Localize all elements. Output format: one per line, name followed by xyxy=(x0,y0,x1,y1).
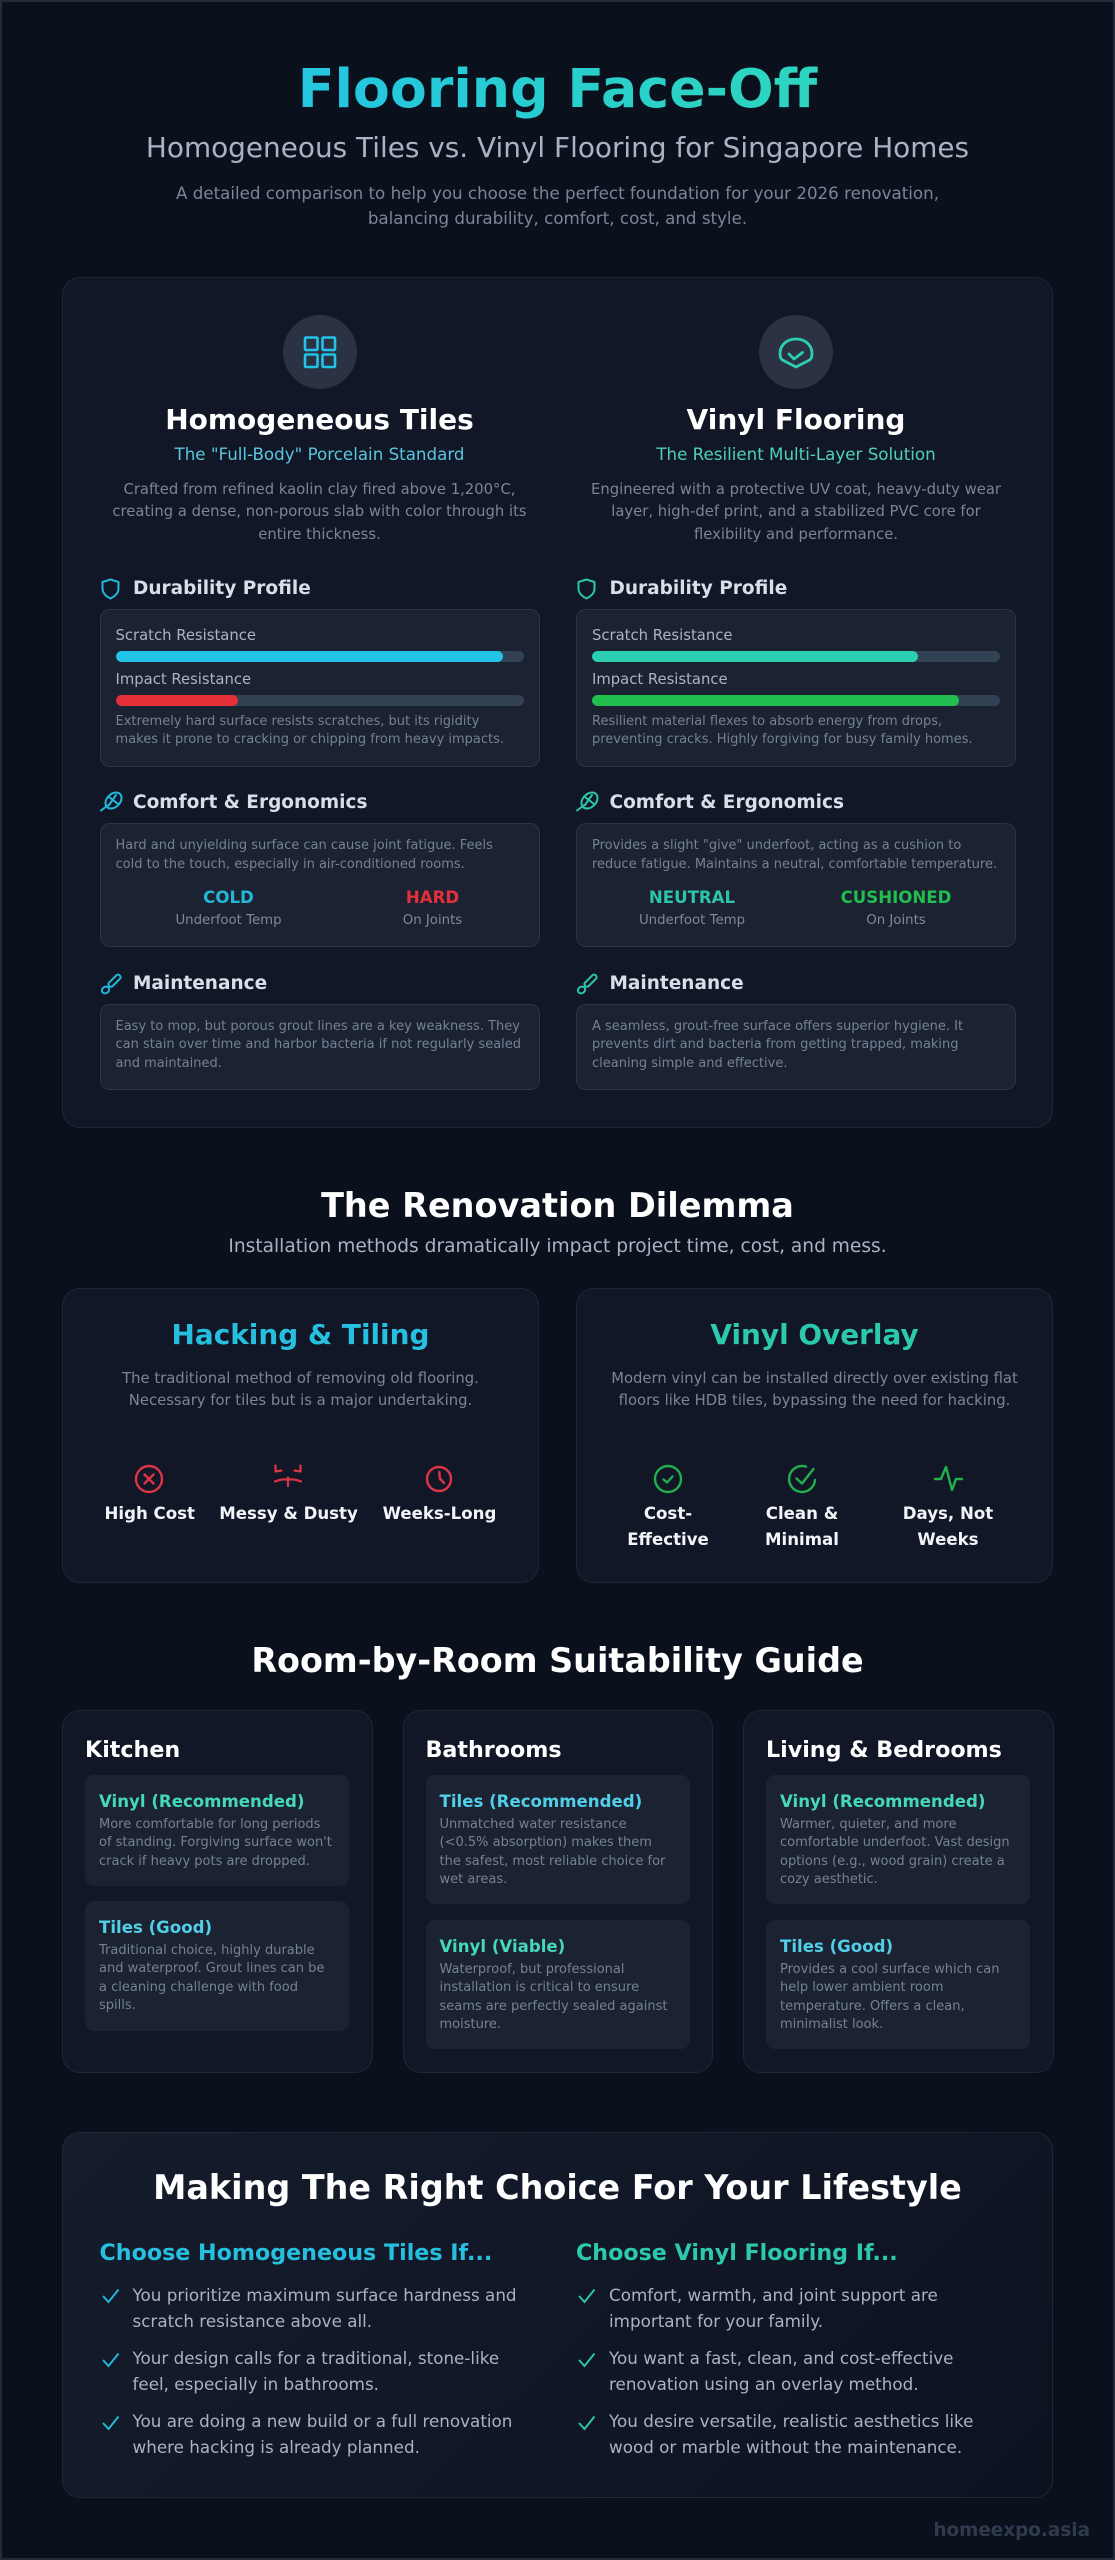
icon: check xyxy=(578,2286,598,2306)
description xyxy=(611,1370,1018,1408)
heading: Choose Vinyl Flooring If... xyxy=(576,2240,898,2266)
card text: wet areas. xyxy=(440,1872,507,1887)
box: maintenance xyxy=(576,1004,1016,1090)
description: The traditional method of removing old flooring. xyxy=(122,1370,479,1386)
heading: Vinyl Overlay xyxy=(710,1318,919,1350)
card: vinyl viable xyxy=(426,1920,690,2049)
heading: comfort: Comfort & Ergonomics xyxy=(610,792,844,813)
label: cost-effective: Effective xyxy=(627,1530,709,1548)
intro text: balancing durability, comfort, cost, and style. xyxy=(368,208,747,228)
list item: feel, especially in bathrooms. xyxy=(132,2374,379,2394)
intro text xyxy=(176,182,939,228)
card text: temperature. Offers a clean, xyxy=(780,1999,965,2014)
icon: feather xyxy=(100,792,122,812)
card text: Waterproof, but professional xyxy=(440,1962,624,1976)
stat label: on joints: On Joints xyxy=(403,913,462,928)
list item xyxy=(132,2285,517,2331)
card text: Provides a cool surface which can xyxy=(780,1962,1000,1976)
icon: feather xyxy=(576,792,598,812)
maintenance note xyxy=(592,1019,963,1071)
card text: comfortable underfoot. Vast design xyxy=(780,1835,1010,1850)
stat label: underfoot temp: Underfoot Temp xyxy=(639,913,745,928)
card text: More comfortable for long periods xyxy=(99,1816,320,1832)
icon: tile grid xyxy=(282,315,356,389)
durability note: Resilient material flexes to absorb energy from drops, xyxy=(592,714,942,729)
label: weeks-long: Weeks-Long xyxy=(383,1504,496,1522)
card title: Tiles (Recommended) xyxy=(440,1792,642,1810)
comfort note: cold to the touch, especially in air-conditioned rooms. xyxy=(116,857,465,872)
room name: Bathrooms xyxy=(426,1737,562,1763)
stat label: on joints: On Joints xyxy=(866,913,926,928)
description xyxy=(112,481,527,543)
list item: wood or marble without the maintenance. xyxy=(609,2437,962,2457)
tagline: The "Full-Body" Porcelain Standard xyxy=(174,444,464,464)
card text xyxy=(99,1942,324,2013)
card text: Unmatched water resistance xyxy=(440,1816,627,1832)
card text: help lower ambient room xyxy=(780,1980,944,1995)
description: Crafted from refined kaolin clay fired above 1,200°C, xyxy=(124,481,516,498)
stat label: underfoot temp: Underfoot Temp xyxy=(175,913,282,928)
icon: activity xyxy=(934,1466,964,1492)
heading: Choose Homogeneous Tiles If... xyxy=(100,2240,492,2266)
panel: kitchen xyxy=(62,1710,372,2073)
list item: You want a fast, clean, and cost-effective xyxy=(609,2348,954,2368)
label: cost-effective xyxy=(627,1504,709,1548)
column: choose vinyl xyxy=(576,2236,1016,2476)
label: clean and minimal: Minimal xyxy=(765,1530,839,1548)
maintenance note: cleaning simple and effective. xyxy=(592,1056,787,1071)
icon: shield xyxy=(102,578,120,600)
column: vinyl flooring xyxy=(576,315,1016,1090)
card text xyxy=(440,1816,666,1887)
icon: shield xyxy=(578,578,596,600)
icon: check xyxy=(102,2288,120,2304)
heading: Vinyl Flooring xyxy=(687,402,905,436)
card: vinyl recommended xyxy=(766,1775,1030,1904)
card text: minimalist look. xyxy=(780,2017,883,2032)
icon: check xyxy=(102,2413,122,2433)
description: Engineered with a protective UV coat, heavy-duty wear xyxy=(591,481,1001,498)
icon: brush xyxy=(576,974,598,994)
durability note: makes it prone to cracking or chipping from heavy impacts. xyxy=(116,732,504,747)
heading: maintenance: Maintenance xyxy=(610,972,744,994)
label: scratch: Scratch Resistance xyxy=(592,626,732,644)
card: tiles good xyxy=(766,1920,1030,2049)
icon: check xyxy=(578,2413,598,2433)
heading: Making The Right Choice For Your Lifestyle xyxy=(153,2168,962,2206)
label: impact: Impact Resistance xyxy=(592,670,728,688)
list item: Your design calls for a traditional, stone-like xyxy=(132,2348,499,2368)
icon: check xyxy=(578,2350,598,2370)
bar: impact 90% xyxy=(592,695,1000,706)
comfort note xyxy=(116,838,493,872)
description: Modern vinyl can be installed directly over existing flat xyxy=(611,1370,1018,1386)
footer brand: homeexpo.asia xyxy=(933,2520,1090,2541)
label: scratch: Scratch Resistance xyxy=(116,626,256,644)
icon: clean check xyxy=(788,1464,816,1494)
heading: durability: Durability Profile xyxy=(133,578,311,598)
list item: Comfort, warmth, and joint support are xyxy=(609,2285,938,2305)
label: messy and dusty: Messy & Dusty xyxy=(219,1504,358,1522)
column: choose tiles xyxy=(100,2240,517,2457)
label: days not weeks xyxy=(903,1504,993,1548)
maintenance note xyxy=(116,1019,521,1071)
card text: installation is critical to ensure xyxy=(440,1980,639,1995)
tagline: The Resilient Multi-Layer Solution xyxy=(656,444,936,464)
panel: lifestyle choice xyxy=(62,2132,1053,2498)
icon: brush xyxy=(100,974,122,994)
maintenance note: Easy to mop, but porous grout lines are a key weakness. They xyxy=(116,1019,520,1034)
icon: vinyl badge xyxy=(759,315,833,389)
comfort note: reduce fatigue. Maintains a neutral, comfortable temperature. xyxy=(592,857,997,872)
box: maintenance xyxy=(100,1004,540,1090)
card text xyxy=(440,1962,668,2032)
bar: impact 30% xyxy=(116,695,524,706)
panel: bathrooms xyxy=(402,1710,713,2073)
description xyxy=(591,481,1001,543)
card text: of standing. Forgiving surface won't xyxy=(99,1835,332,1850)
card title: Vinyl (Recommended) xyxy=(780,1792,985,1810)
label: days not weeks: Days, Not xyxy=(903,1504,993,1522)
label: days not weeks: Weeks xyxy=(917,1530,979,1548)
list item: You desire versatile, realistic aesthetics like xyxy=(609,2411,973,2431)
box: durability bars xyxy=(100,609,540,766)
heading: room guide: Room-by-Room Suitability Guide xyxy=(251,1641,864,1680)
room name: Living & Bedrooms xyxy=(766,1737,1002,1763)
title: Flooring Face-Off xyxy=(298,56,817,120)
column: homogeneous tiles xyxy=(100,315,540,1090)
list item: You are doing a new build or a full renovation xyxy=(132,2411,512,2431)
durability note xyxy=(592,714,973,747)
list item xyxy=(132,2408,512,2460)
description: Necessary for tiles but is a major undertaking. xyxy=(129,1392,472,1408)
card text: crack if heavy pots are dropped. xyxy=(99,1854,310,1869)
box: durability bars xyxy=(576,609,1016,766)
card: vinyl recommended xyxy=(85,1775,349,1886)
list item: You prioritize maximum surface hardness and xyxy=(132,2285,517,2305)
title xyxy=(0,56,1115,120)
card text: Warmer, quieter, and more xyxy=(780,1816,956,1832)
heading: Hacking & Tiling xyxy=(172,1318,429,1350)
maintenance note: A seamless, grout-free surface offers superior hygiene. It xyxy=(592,1019,963,1034)
icon: dust xyxy=(274,1464,302,1488)
list item: important for your family. xyxy=(609,2311,823,2331)
panel: material comparison xyxy=(62,277,1053,1128)
description: layer, high-def print, and a stabilized PVC core for xyxy=(611,503,981,520)
comfort note xyxy=(592,838,997,872)
label: impact: Impact Resistance xyxy=(116,670,251,688)
card text: options (e.g., wood grain) create a xyxy=(780,1854,1005,1869)
stat: hard: HARD xyxy=(406,888,459,907)
header xyxy=(146,56,969,228)
subtitle: Homogeneous Tiles vs. Vinyl Flooring for Singapore Homes xyxy=(146,131,969,164)
maintenance note: can stain over time and harbor bacteria if not regularly sealed xyxy=(116,1037,521,1052)
icon: check xyxy=(102,2352,120,2368)
subheading: renovation: Installation methods dramatically impact project time, cost, and mess. xyxy=(228,1236,887,1257)
description: creating a dense, non-porous slab with color through its xyxy=(112,503,527,520)
heading: Homogeneous Tiles xyxy=(165,402,474,436)
card: tiles recommended xyxy=(426,1775,690,1904)
label: clean and minimal xyxy=(765,1504,839,1548)
panel: hacking and tiling xyxy=(62,1288,539,1583)
room name: Kitchen xyxy=(85,1737,180,1763)
list item: renovation using an overlay method. xyxy=(609,2374,919,2394)
maintenance note: prevents dirt and bacteria from getting trapped, making xyxy=(592,1037,959,1052)
durability note: Extremely hard surface resists scratches, but its rigidity xyxy=(116,714,479,729)
maintenance note: and maintained. xyxy=(116,1056,222,1071)
description: entire thickness. xyxy=(258,526,381,543)
box: comfort xyxy=(100,823,540,947)
stat: cold: COLD xyxy=(203,888,254,907)
panel: vinyl overlay xyxy=(576,1288,1053,1583)
description xyxy=(122,1370,479,1408)
list item xyxy=(609,2282,938,2334)
stat: neutral: NEUTRAL xyxy=(649,888,735,907)
label: cost-effective: Cost- xyxy=(644,1504,692,1522)
description: floors like HDB tiles, bypassing the need for hacking. xyxy=(619,1392,1010,1408)
list item xyxy=(132,2348,499,2394)
card text: cozy aesthetic. xyxy=(780,1872,878,1887)
card text: a cleaning challenge with food xyxy=(99,1980,298,1995)
heading: durability: Durability Profile xyxy=(610,578,787,598)
list item xyxy=(609,2408,973,2460)
stat: cushioned: CUSHIONED xyxy=(841,888,951,907)
list item xyxy=(609,2345,954,2397)
card text: seams are perfectly sealed against xyxy=(440,1999,667,2014)
comfort note: Hard and unyielding surface can cause joint fatigue. Feels xyxy=(116,838,493,853)
card text: (<0.5% absorption) makes them xyxy=(440,1835,652,1850)
icon: check circle xyxy=(654,1464,682,1494)
card text: spills. xyxy=(99,1998,136,2013)
comfort note: Provides a slight "give" underfoot, acting as a cushion to xyxy=(592,838,961,853)
icon: clock xyxy=(426,1466,452,1492)
card: tiles good xyxy=(85,1901,349,2031)
panel: living and bedrooms xyxy=(743,1710,1054,2073)
box: comfort xyxy=(576,823,1016,947)
card title: Vinyl (Viable) xyxy=(440,1936,565,1956)
card text: moisture. xyxy=(440,2017,501,2032)
card text xyxy=(780,1962,1000,2032)
card text xyxy=(780,1816,1010,1887)
heading: renovation dilemma: The Renovation Dilemma xyxy=(321,1186,794,1224)
card text: Traditional choice, highly durable xyxy=(99,1942,315,1958)
card title: Vinyl (Recommended) xyxy=(99,1792,304,1810)
bar: scratch 95% xyxy=(116,651,524,662)
description: flexibility and performance. xyxy=(694,526,898,543)
label: high cost: High Cost xyxy=(104,1504,195,1522)
card title: Tiles (Good) xyxy=(99,1918,212,1936)
label: clean and minimal: Clean & xyxy=(766,1504,838,1522)
list item: scratch resistance above all. xyxy=(132,2311,372,2331)
durability note: preventing cracks. Highly forgiving for busy family homes. xyxy=(592,732,973,747)
bar: scratch 80% xyxy=(592,651,1000,662)
durability note xyxy=(116,714,504,747)
card text: and waterproof. Grout lines can be xyxy=(99,1961,324,1976)
intro text: A detailed comparison to help you choose the perfect foundation for your 2026 renovation, xyxy=(176,182,939,202)
icon: x circle xyxy=(134,1464,164,1494)
card text xyxy=(99,1816,332,1869)
list item: where hacking is already planned. xyxy=(132,2437,420,2457)
heading: comfort: Comfort & Ergonomics xyxy=(133,792,368,813)
card title: Tiles (Good) xyxy=(780,1936,893,1956)
heading: maintenance: Maintenance xyxy=(133,972,267,994)
card text: the safest, most reliable choice for xyxy=(440,1854,665,1869)
